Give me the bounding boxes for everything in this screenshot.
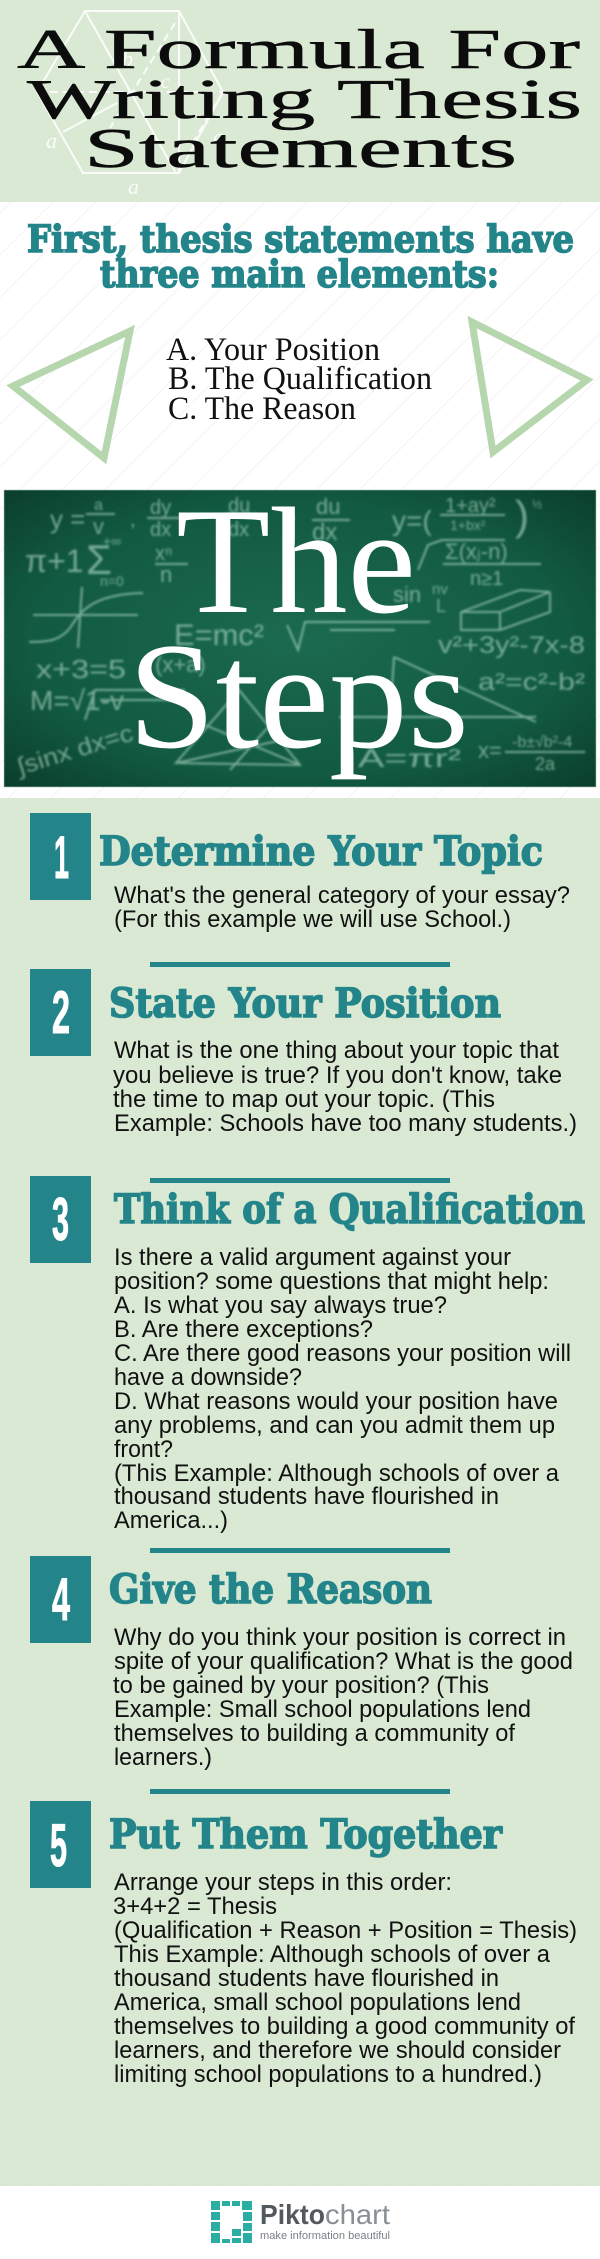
body 4 [113, 1624, 573, 1771]
heading: three main elements: three main elements: [100, 252, 499, 296]
heading 1: Determine Your Topic [99, 828, 543, 875]
body 5: themselves to building a good community of [114, 2013, 575, 2040]
icon: white hexagon geometry drawing: b [122, 46, 133, 71]
body 3: have a downside? [114, 1364, 302, 1391]
chalk formulas: n=0 [100, 573, 124, 589]
chalk formulas: M=√1-v [30, 685, 124, 716]
number box 2: 2 [52, 979, 70, 1046]
chalk formulas: n [160, 562, 172, 587]
heading 2: State Your Position [109, 980, 501, 1027]
chalk formulas: Σ(xⱼ-n) [445, 539, 508, 564]
body 2 [113, 1037, 577, 1137]
body 1: (For this example we will use School.) [114, 906, 511, 933]
body 3: D. What reasons would your position have [114, 1388, 558, 1415]
chalk formulas: (x+a) [155, 652, 206, 677]
body 5 [113, 1869, 577, 2088]
number box 3 [30, 1176, 91, 1263]
text block: element list: A. Your Position [166, 332, 380, 368]
step 5 [30, 1801, 577, 2088]
header panel [0, 0, 600, 202]
chalk formulas: 1+bx² [450, 517, 486, 533]
body 4: Example: Small school populations lend [114, 1696, 531, 1723]
chalk formulas: v [283, 509, 295, 536]
body 5: 3+4+2 = Thesis [113, 1893, 277, 1920]
number box 2 [30, 969, 91, 1056]
footer: Piktochart logo [0, 2186, 600, 2259]
chalk formulas: ) [515, 492, 529, 539]
body 3: any problems, and can you admit them up [114, 1412, 555, 1439]
step 3 [30, 1176, 585, 1534]
icon: white hexagon geometry drawing [37, 11, 224, 199]
chalk formulas: , [130, 509, 136, 531]
chalk formulas: π+1 [25, 543, 84, 579]
chalk formulas: dx [312, 519, 337, 546]
heading: The Steps: The [176, 477, 416, 645]
icon: white hexagon geometry drawing: a [46, 128, 57, 153]
body 5: America, small school populations lend [114, 1989, 521, 2016]
body 5: learners, and therefore we should consider [114, 2037, 561, 2064]
chalk formulas: A=πr² [358, 743, 462, 773]
chalk formulas: dy [150, 497, 171, 519]
heading 4: Give the Reason [109, 1566, 432, 1613]
body 3: Is there a valid argument against your [114, 1244, 511, 1271]
number box 5: 5 [50, 1812, 67, 1879]
step 1 [30, 813, 570, 933]
body 5: thousand students have flourished in [114, 1965, 499, 1992]
chalk formulas: ½ [532, 497, 542, 511]
number box 4 [30, 1556, 91, 1643]
body 2: the time to map out your topic. (This [113, 1086, 495, 1113]
heading: The Steps [128, 477, 469, 780]
body 3: (This Example: Although schools of over a [114, 1460, 560, 1487]
heading: three main elements [27, 217, 574, 296]
body 2: you believe is true? If you don't know, take [113, 1062, 562, 1089]
number box 3: 3 [52, 1186, 69, 1253]
chalk formulas: -b±√b²-4 [512, 734, 572, 751]
title: A Formula For [17, 19, 581, 81]
icon: Piktochart mark [211, 2201, 252, 2243]
panel: steps background [0, 798, 600, 2186]
body 3: position? some questions that might help: [114, 1268, 549, 1295]
number box 5 [30, 1801, 91, 1888]
body 2: What is the one thing about your topic that [114, 1037, 559, 1064]
chalk formulas: x= [478, 738, 502, 763]
logo wordmark [260, 2199, 390, 2242]
chalk formulas: v²+3y²-7x-8 [438, 632, 585, 659]
chalk formulas [12, 492, 585, 781]
body 4: spite of your qualification? What is the good [114, 1648, 573, 1675]
chalk formulas: xⁿ [155, 543, 172, 565]
body 3: thousand students have flourished in [114, 1483, 499, 1510]
panel: chalkboard banner [4, 477, 596, 787]
body 5: limiting school populations to a hundred.) [114, 2061, 542, 2088]
chalk formulas: y = [50, 504, 85, 534]
step 4 [30, 1556, 573, 1771]
logo wordmark: chart [325, 2199, 390, 2230]
text block: element list: C. The Reason [168, 391, 356, 427]
body 3: A. Is what you say always true? [114, 1292, 447, 1319]
number box 4: 4 [52, 1566, 70, 1633]
icon: right triangle [472, 322, 587, 452]
chalk formulas: dx [150, 519, 171, 541]
chalk formulas: du [228, 495, 250, 517]
body 3: America...) [114, 1507, 228, 1534]
body 5: This Example: Although schools of over a [114, 1941, 551, 1968]
body 5: (Qualification + Reason + Position = Thesis) [114, 1917, 577, 1944]
icon: white hexagon geometry drawing: c [161, 71, 170, 93]
chalk formulas: L [436, 596, 446, 616]
heading 5: Put Them Together [109, 1811, 503, 1858]
chalk formulas: ∫sinx dx=c [12, 720, 137, 781]
body 1: What's the general category of your essay? [114, 882, 570, 909]
body 4: Why do you think your position is correct in [114, 1624, 566, 1651]
chalk formulas: dx [228, 519, 249, 541]
chalk formulas: v [93, 514, 104, 539]
text block: element list: B. The Qualification [168, 361, 432, 397]
chalk formulas: a [94, 497, 103, 514]
text block: element list [166, 332, 432, 427]
chalk formulas: x+3=5 [36, 654, 126, 684]
icon: white hexagon geometry drawing: a [128, 174, 139, 199]
chalk formulas: sin [393, 582, 421, 607]
body 3: C. Are there good reasons your position will [114, 1340, 571, 1367]
number box 1 [30, 813, 91, 900]
chalk formulas: y=( [392, 505, 432, 536]
body 2: Example: Schools have too many students.) [114, 1110, 577, 1137]
body 3: front? [114, 1436, 173, 1463]
icon: left triangle [13, 331, 130, 458]
chalk formulas: n≥1 [470, 568, 503, 590]
chalk formulas: Σ [86, 536, 112, 583]
step 2 [30, 969, 577, 1137]
body 1 [114, 882, 570, 933]
chalk formulas: E=mc² [174, 619, 264, 652]
chalk formulas: nv [432, 581, 448, 598]
body 4: themselves to building a community of [114, 1720, 515, 1747]
panel: three main elements [0, 202, 600, 798]
body 3: B. Are there exceptions? [114, 1316, 373, 1343]
title: Writing Thesis [27, 69, 582, 131]
icon: white hexagon geometry drawing: a [213, 124, 224, 149]
chalk formulas: 1+ay² [445, 495, 496, 517]
body 4: learners.) [114, 1744, 212, 1771]
body 3 [114, 1244, 571, 1534]
body 4: to be gained by your position? (This [113, 1672, 489, 1699]
logo wordmark: make information beautiful [260, 2230, 390, 2242]
chalk formulas: +∞ [103, 533, 121, 549]
chalk formulas: du [316, 494, 340, 519]
logo wordmark: Pikto [260, 2199, 325, 2230]
chalk formulas: 2a [535, 754, 556, 774]
title [17, 19, 582, 180]
body 5: Arrange your steps in this order: [114, 1869, 452, 1896]
number box 1: 1 [54, 824, 69, 891]
chalk formulas: a²=c²-b² [478, 669, 585, 696]
title: Statements [84, 118, 517, 180]
heading: The Steps: Steps [128, 612, 469, 780]
